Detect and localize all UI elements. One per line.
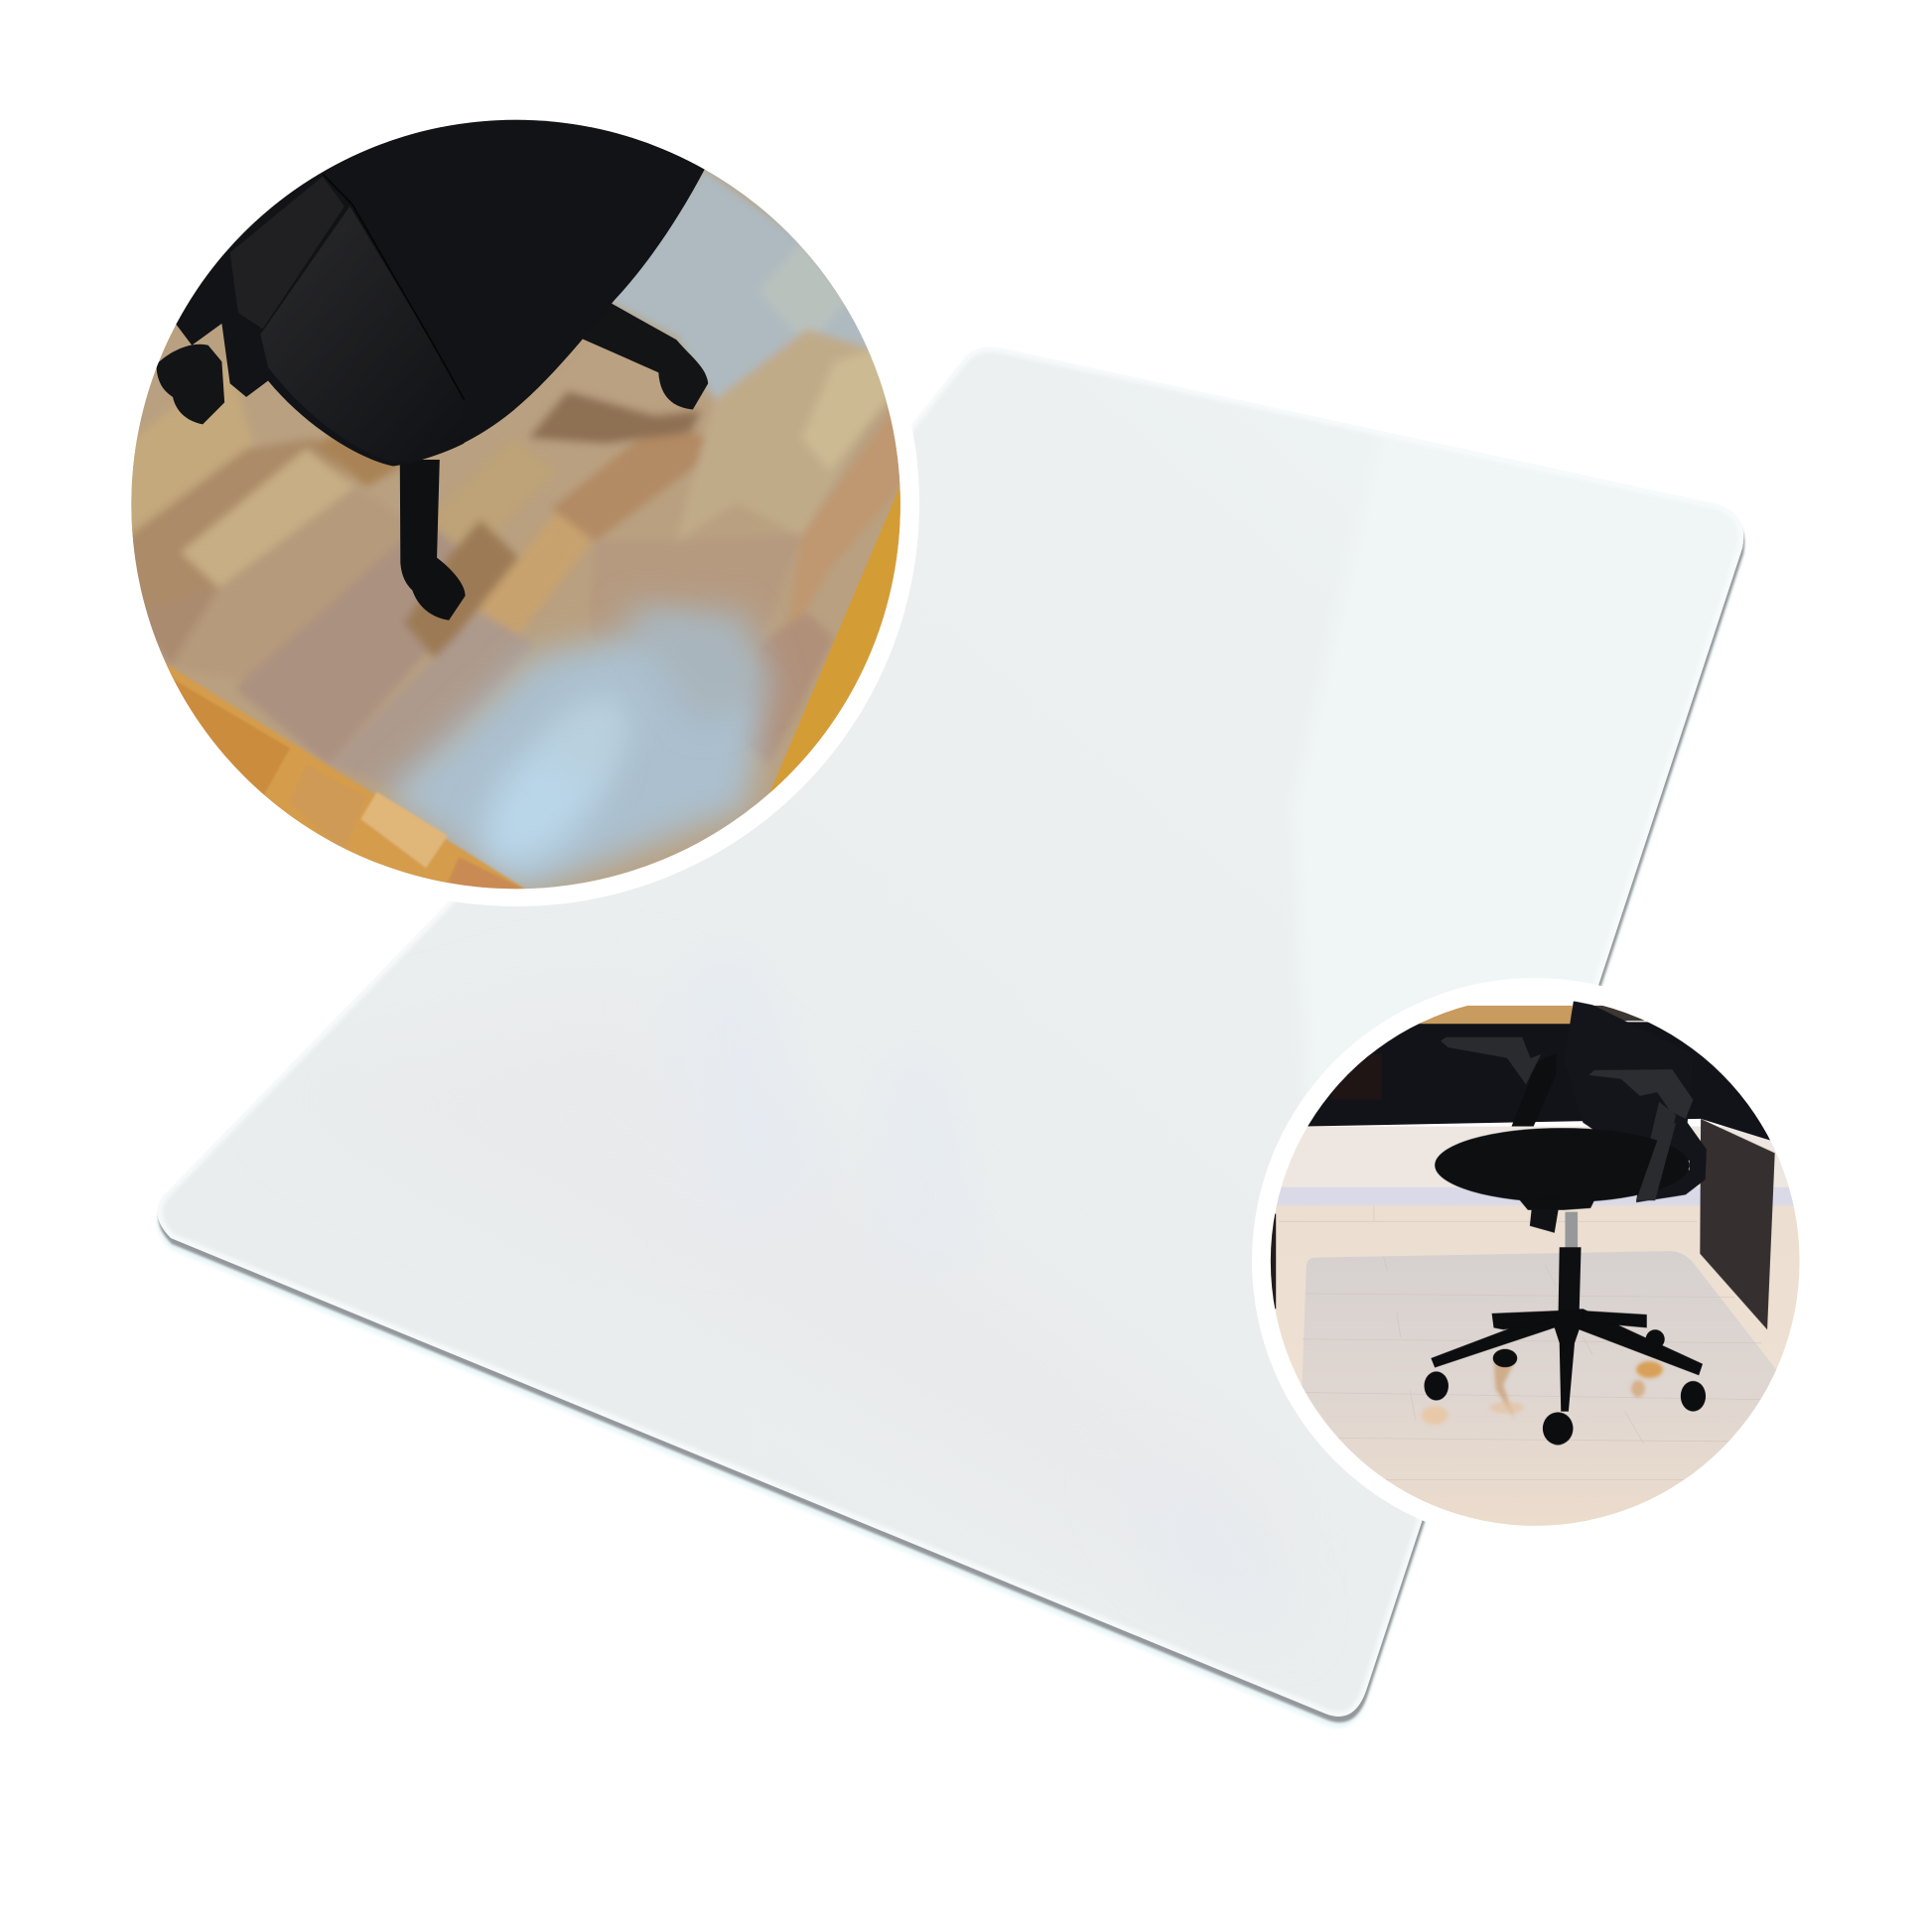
exposed wood: right strip: [769, 484, 910, 797]
right armrest: [1588, 1069, 1693, 1119]
photo circle: office chair on mat with white ring: [1252, 978, 1818, 1544]
photo circle: wood floor close-up with white ring: [113, 89, 919, 906]
right arm support: [1636, 1102, 1676, 1200]
five star base: [1431, 1309, 1703, 1412]
warm reflections: [1422, 1358, 1663, 1425]
back wall under desk: [1260, 1127, 1811, 1189]
chrome column: [1565, 1212, 1578, 1250]
floor plank lines: [1279, 1206, 1792, 1479]
under-seat hub: [1518, 1198, 1594, 1210]
exposed wood: bottom left: [165, 662, 526, 890]
chair caster: left: [157, 345, 224, 424]
chair seat: [176, 119, 705, 467]
desk side leg: [1700, 1119, 1775, 1329]
bluish glare on mat: [382, 623, 763, 896]
floor under clear mat: [121, 111, 910, 900]
white ring around office photo: [1252, 978, 1818, 1544]
desk panel brown reflection: [1332, 1054, 1382, 1100]
close-up photo scene: [121, 89, 910, 906]
gas lift lever knob: [1530, 1208, 1559, 1233]
lavender skirting strip: [1260, 1187, 1811, 1205]
black column: [1559, 1247, 1582, 1314]
left arm support: [1511, 1054, 1557, 1127]
desk panel: [1308, 1022, 1771, 1141]
seat seam line: [323, 174, 464, 400]
white ring around close-up photo: [113, 100, 919, 906]
seat lower panel highlight: [260, 207, 464, 462]
chair backrest: [1564, 1001, 1707, 1202]
white gap in backrest: [1608, 1137, 1690, 1171]
right arm support front: [1636, 1123, 1676, 1200]
floor: [1260, 1204, 1811, 1531]
casters: [1424, 1329, 1706, 1445]
chair caster: front: [400, 460, 466, 621]
chair mat: large clear panel: [158, 347, 1787, 1727]
chair caster: right: [579, 302, 708, 410]
left armrest: [1441, 1037, 1541, 1084]
chair shadow on floor: [529, 391, 701, 444]
desk top wood: [1419, 1005, 1573, 1025]
chair seat: [1435, 1128, 1690, 1202]
office photo scene: [1260, 1001, 1811, 1531]
left desk leg: [1271, 1213, 1277, 1309]
seat upper left panel highlight: [230, 177, 345, 329]
clear mat on floor: [1302, 1251, 1777, 1529]
